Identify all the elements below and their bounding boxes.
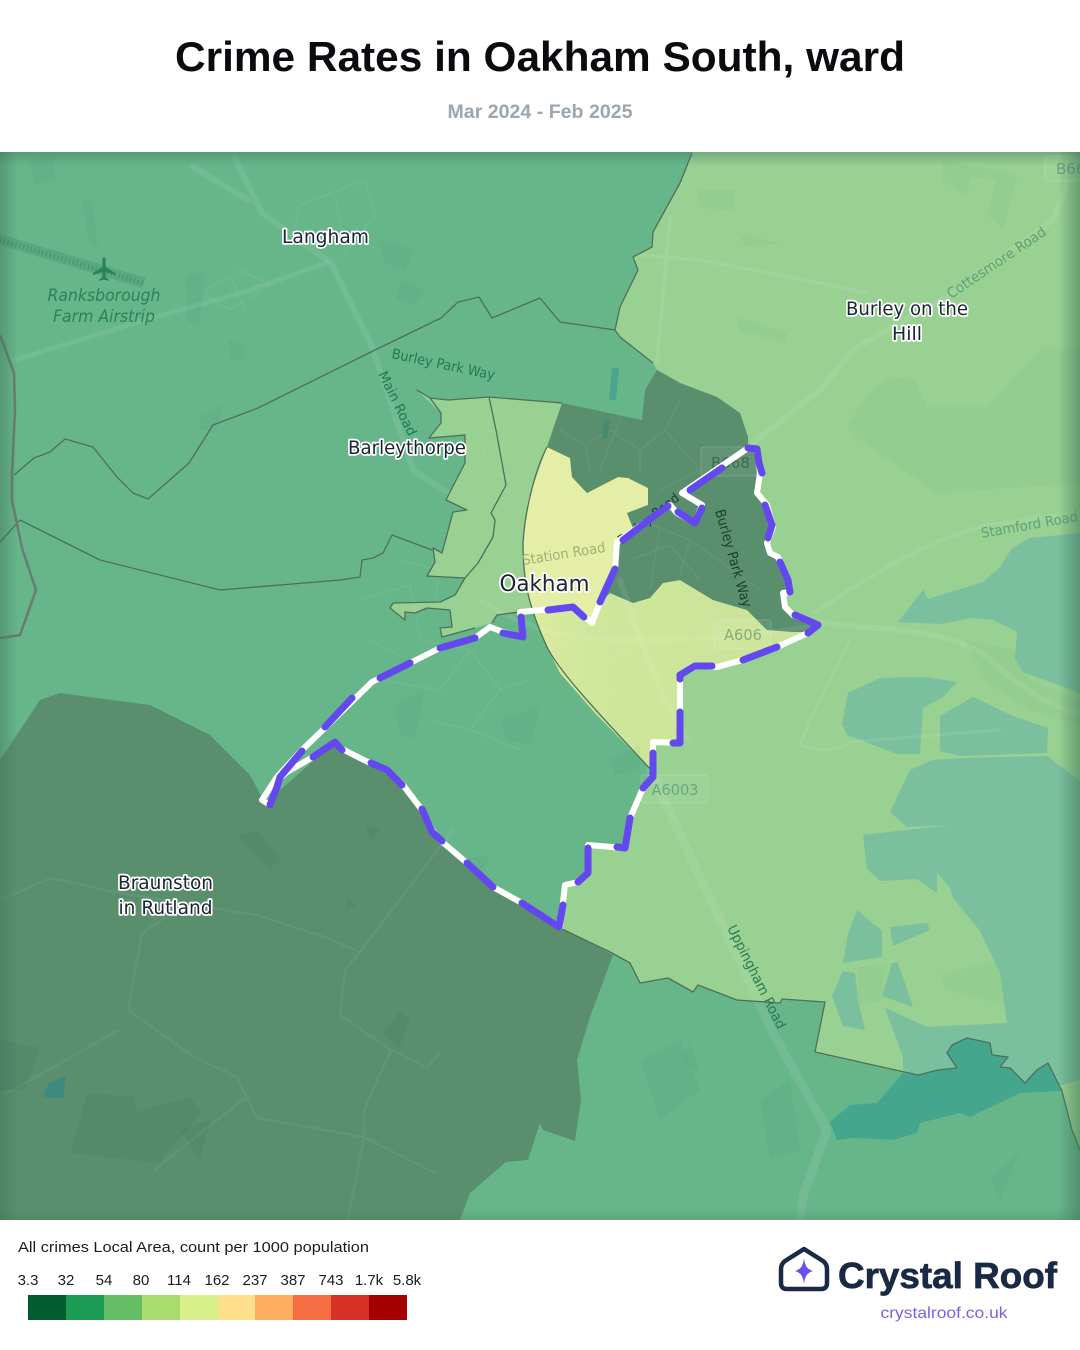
title: Crime Rates in Oakham South, ward bbox=[175, 33, 905, 80]
airstrip label: Ranksborough bbox=[48, 286, 160, 305]
place labels: Burley on the bbox=[846, 298, 968, 320]
legend bbox=[18, 1239, 422, 1320]
road labels: B668 bbox=[711, 454, 750, 472]
light-area darker farmland bbox=[698, 160, 1080, 1005]
legend value labels: 80 bbox=[133, 1272, 149, 1289]
road badges bbox=[641, 156, 1080, 803]
legend title: All crimes Local Area, count per 1000 population bbox=[18, 1239, 369, 1256]
county border west edge bbox=[0, 335, 36, 638]
airstrip label: Farm Airstrip bbox=[53, 307, 155, 326]
minor roads south-west bbox=[0, 827, 455, 1220]
road and field texture bbox=[14, 157, 1080, 1220]
ward outline purple dashes bbox=[270, 448, 818, 927]
legend colour scale bbox=[28, 1295, 407, 1320]
choropleth map panel bbox=[0, 152, 1080, 1220]
road labels: Burley Road bbox=[615, 491, 683, 548]
place labels bbox=[118, 226, 968, 919]
map edge fade bbox=[0, 152, 1080, 1220]
legend value labels: 3.3 bbox=[18, 1272, 38, 1289]
airstrip label bbox=[48, 286, 160, 326]
legend value labels bbox=[18, 1272, 422, 1289]
region: dark green north Oakham bbox=[547, 370, 818, 632]
legend value labels: 114 bbox=[167, 1272, 191, 1289]
road labels: Burley Park Way bbox=[390, 346, 496, 384]
map base region: mid green bbox=[0, 152, 1080, 1220]
region: pale yellow Oakham centre bbox=[523, 447, 648, 623]
water: dark teal lake bbox=[830, 1038, 1062, 1140]
airstrip runway bbox=[0, 234, 146, 288]
icon: airstrip plane bbox=[93, 257, 115, 281]
brand url: crystalroof.co.uk bbox=[880, 1305, 1009, 1322]
subtle field patches bbox=[28, 155, 1020, 1200]
place labels: Langham bbox=[282, 226, 369, 248]
brand logo bbox=[781, 1249, 1058, 1322]
legend value labels: 1.7k bbox=[355, 1272, 384, 1289]
road labels bbox=[374, 160, 1080, 1032]
region: light green east bbox=[560, 152, 1080, 1150]
urban street texture bbox=[205, 180, 760, 750]
legend value labels: 32 bbox=[58, 1272, 74, 1289]
region: dark green south-west bbox=[0, 693, 613, 1220]
place labels: Braunston bbox=[118, 872, 213, 894]
brand name: Crystal Roof bbox=[838, 1255, 1058, 1296]
road labels: A606 bbox=[724, 626, 762, 644]
subtitle: date range: Mar 2024 - Feb 2025 bbox=[448, 102, 633, 123]
region: Barleythorpe light green bbox=[390, 390, 562, 637]
road labels: Main Road bbox=[374, 369, 419, 439]
place labels: in Rutland bbox=[118, 897, 212, 919]
legend value labels: 743 bbox=[318, 1272, 344, 1289]
road labels: Uppingham Road bbox=[723, 923, 789, 1032]
icon: house with star bbox=[781, 1249, 827, 1289]
pond in south-west bbox=[43, 1076, 66, 1098]
water: east reservoir areas bbox=[832, 533, 1080, 1085]
place labels: Oakham bbox=[500, 572, 590, 597]
road labels: Station Road bbox=[521, 540, 607, 569]
place labels: Barleythorpe bbox=[348, 437, 466, 459]
road labels: Burley Park Way bbox=[711, 508, 754, 609]
water strip north of Oakham bbox=[602, 368, 619, 438]
legend value labels: 387 bbox=[280, 1272, 306, 1289]
road labels: Cottesmore Road bbox=[944, 224, 1049, 302]
boundary lines bbox=[0, 153, 1080, 1150]
legend value labels: 54 bbox=[96, 1272, 112, 1289]
ward boundary: Oakham South bbox=[262, 448, 818, 927]
ward outline white bbox=[262, 448, 818, 927]
road labels: A6003 bbox=[652, 781, 698, 799]
legend value labels: 237 bbox=[242, 1272, 268, 1289]
region: lower yellow-green band bbox=[532, 580, 813, 772]
legend value labels: 5.8k bbox=[393, 1272, 422, 1289]
place labels: Hill bbox=[892, 323, 922, 345]
legend value labels: 162 bbox=[204, 1272, 230, 1289]
